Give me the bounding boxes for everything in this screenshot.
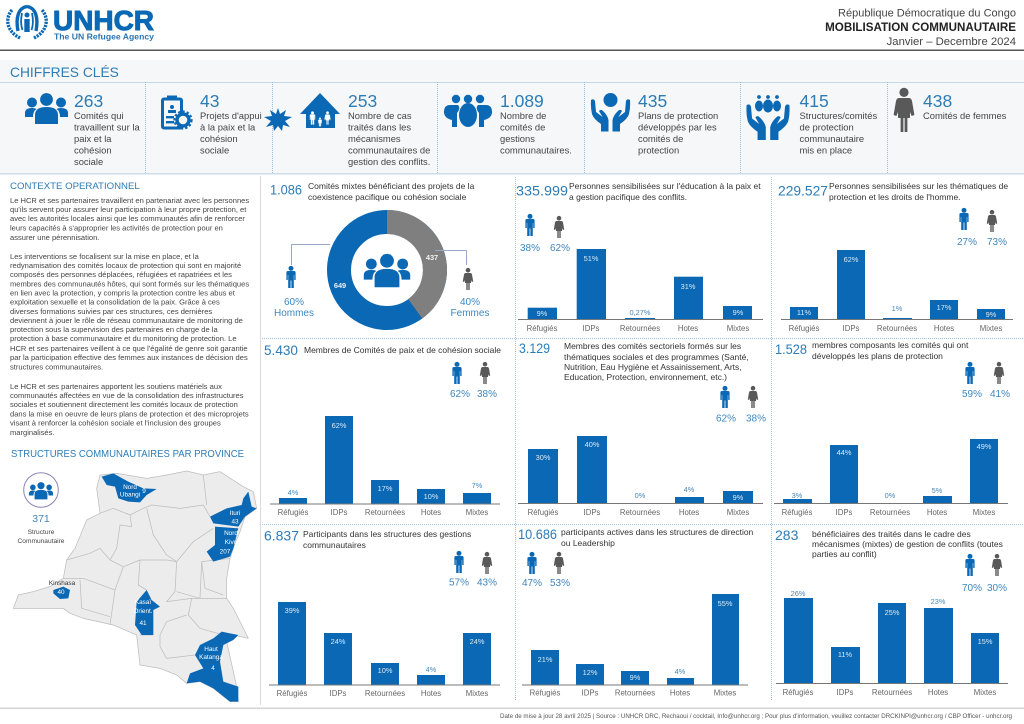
- bar chart: 7%: [472, 481, 483, 490]
- bar chart: Retournées: [872, 688, 912, 697]
- bar chart: IDPs: [583, 324, 600, 333]
- text block: contexte opérationnel: assurer une pérennisation.: [10, 233, 99, 242]
- panel: personnes sensibilisées paix: [516, 181, 763, 333]
- gender split: [962, 362, 1010, 400]
- gender split: 41%: [990, 389, 1010, 400]
- panel: bénéficiaires conflits: parties au conflit): [812, 549, 877, 559]
- kpi: 435 plans de protection: Plans de protection: [638, 110, 718, 121]
- gender split: 30%: [987, 583, 1007, 594]
- gender split: 62%: [450, 389, 470, 400]
- donut chart: 437: [426, 253, 438, 262]
- text block: contexte opérationnel: leurs capacités à s'approprier les activités de protection pour en: [10, 224, 223, 232]
- bar chart: IDPs: [584, 508, 601, 517]
- text block: contexte opérationnel: marginalisés.: [10, 428, 54, 437]
- map label: Nord Ubangi: Nord: [123, 484, 137, 491]
- bar chart: Retournées: [877, 324, 917, 333]
- bar chart: Mixtes: [466, 689, 488, 698]
- panel: participants structures de gestion: communautaires: [303, 540, 366, 550]
- text block: contexte opérationnel: visant à renforcer la cohésion sociale et l'inclusion des groupes: [10, 418, 221, 428]
- bar chart: 31%: [681, 282, 696, 291]
- bar chart: 62%: [844, 255, 859, 264]
- report title block: [825, 8, 1016, 48]
- bar chart: 23%: [931, 597, 946, 606]
- bar chart: Mixtes: [466, 508, 488, 517]
- bar chart: [776, 589, 1008, 697]
- bar chart: 24%: [470, 637, 485, 646]
- gender split: 73%: [987, 237, 1007, 248]
- bar chart: [269, 602, 500, 698]
- panel: comités sectoriels: thématiques sociales et des programmes (Santé,: [564, 352, 749, 362]
- kpi: 43 projets: Projets d'appui: [200, 110, 262, 121]
- panel: membres plans de protection: développés les plans de protection: [812, 351, 943, 361]
- kpi: 435 plans de protection: comités de: [638, 133, 683, 144]
- kpi: 43 projets: sociale: [200, 144, 229, 156]
- gender split: 70%: [962, 583, 982, 594]
- map: provinces RDC: [13, 471, 257, 702]
- gender split: 53%: [550, 578, 570, 589]
- kpi: 1.089 comités de gestion: Nombre de: [500, 110, 546, 121]
- bar chart: Mixtes: [727, 508, 749, 517]
- kpi: 415 structures: mis en place: [800, 144, 852, 156]
- text block: contexte opérationnel: exploitation sexuelle et la consolidation de la paix. Grâce à ces: [10, 298, 220, 306]
- bar chart: 0%: [635, 491, 646, 500]
- bar chart: 0%: [885, 491, 896, 500]
- panel: chiffres clés: [0, 60, 1024, 175]
- panel: participantes direction: ou Leadership: [561, 538, 615, 548]
- bar chart: [518, 436, 763, 517]
- panel: bénéficiaires conflits: 283: [775, 527, 799, 543]
- text block: contexte opérationnel: dans la mise en oeuvre de leurs plans de protection et des microprojets: [10, 410, 249, 418]
- bar chart: 51%: [584, 254, 599, 263]
- kpi: 1.089 comités de gestion: 1.089: [500, 91, 544, 111]
- bar chart: Mixtes: [980, 324, 1002, 333]
- kpi: 43 projets: 43: [200, 91, 219, 111]
- panel: participants structures de gestion: 6.837: [264, 528, 299, 544]
- footer source note: Date de mise à jour 28 avril 2025 | Source : UNHCR DRC, Rechaoui / cocktail, Info@unhcr.org ; Pour plus d'information, veuillez contacter DRCKINPI@unhcr.org / CBP Officer - unhcr.org: [500, 714, 1012, 720]
- gender split: 38%: [746, 414, 766, 424]
- bar chart: 4%: [684, 485, 695, 494]
- kpi: 415 structures: 415: [800, 91, 829, 111]
- bar chart: Hotes: [934, 324, 954, 333]
- gender split: 62%: [550, 243, 570, 254]
- bar chart: 21%: [538, 655, 553, 664]
- map label: Nord Kivu: Nord: [224, 530, 238, 537]
- panel: membres comités de paix: 5.430: [264, 342, 298, 358]
- kpi: 253 cas traités: communautaires de: [348, 144, 430, 156]
- panel: personnes sensibilisées droits: Personnes sensibilisées sur les thématiques de: [829, 181, 1008, 191]
- kpi: 415 structures: de protection: [800, 122, 854, 132]
- share: hommes: [274, 266, 314, 319]
- bar chart: IDPs: [843, 324, 860, 333]
- text block: contexte opérationnel: diverses formations suivies par ces structures, ces dernières: [10, 307, 212, 316]
- kpi: 43 projets: à la paix et la: [200, 122, 256, 132]
- kpi: 253 cas traités: traités dans les: [348, 122, 411, 132]
- text block: contexte opérationnel: deviennent à jouer le rôle de réseau communautaire de monitoring de: [10, 316, 243, 325]
- bar chart: 10%: [378, 666, 393, 675]
- callout: 371 structures communautaires: 371: [32, 513, 50, 525]
- bar chart: [522, 594, 748, 698]
- panel: personnes sensibilisées droits: [778, 181, 1013, 333]
- bar chart: Réfugiés: [782, 508, 812, 517]
- kpi: 415 structures: communautaire: [800, 133, 864, 144]
- icon: laurel wreath and sheltering hands: [8, 6, 46, 38]
- bar chart: 3%: [792, 491, 803, 500]
- bar chart: Hotes: [421, 508, 441, 517]
- bar chart: 24%: [331, 637, 346, 646]
- map label: Kasaï Oriental: 41: [139, 620, 147, 627]
- kpi: 435 plans de protection: [591, 91, 718, 156]
- kpi: 1.089 comités de gestion: communautaires.: [500, 144, 572, 156]
- bar chart: 4%: [288, 488, 299, 497]
- kpi: 415 structures: Structures/comités: [800, 110, 877, 121]
- text block: contexte opérationnel: avec les autorités locales ainsi que les communautés afin de renforcer: [10, 214, 245, 223]
- share: femmes: Femmes: [451, 308, 489, 319]
- report title block: République Démocratique du Congo: [838, 8, 1016, 20]
- bar chart: 17%: [378, 484, 393, 493]
- kpi: 438 comités de femmes: Comités de femmes: [923, 110, 1007, 121]
- bar chart: Retournées: [620, 324, 660, 333]
- bar chart: 26%: [791, 589, 806, 598]
- bar chart: 9%: [630, 673, 641, 682]
- bar chart: 4%: [426, 665, 437, 674]
- callout: 371 structures communautaires: Communautaire: [18, 538, 65, 545]
- bar chart: [270, 416, 500, 517]
- map label: Kinshasa: 40: [57, 589, 65, 596]
- kpi: 253 cas traités: Nombre de cas: [348, 110, 412, 121]
- logo tagline: The UN Refugee Agency: [54, 32, 154, 42]
- kpi: 435 plans de protection: développés par les: [638, 122, 717, 132]
- gender split: [520, 214, 570, 254]
- gender split: 43%: [477, 578, 497, 588]
- text block: contexte opérationnel: Le HCR et ses partenaires apportent les soutiens matériels aux: [10, 382, 222, 391]
- bar chart: Réfugiés: [783, 688, 813, 697]
- bar chart: 40%: [585, 440, 600, 449]
- map label: Ituri: 43: [231, 518, 239, 526]
- bar chart: [518, 249, 763, 333]
- text block: contexte opérationnel: en lien avec la protection, y compris la protection contre les abus et: [10, 288, 236, 298]
- bar chart: Hotes: [421, 689, 441, 698]
- text block: contexte opérationnel: communautés affectées en vue de la consolidation des infrastructures: [10, 391, 244, 400]
- map label: Nord Ubangi: 9: [142, 488, 146, 495]
- panel title: Comités mixtes bénéficiant des projets de la: [308, 181, 475, 191]
- bar chart: 5%: [932, 486, 943, 495]
- heading: contexte opérationnel: CONTEXTE OPERATIONNEL: [10, 181, 140, 192]
- bar chart: Hotes: [928, 688, 948, 697]
- bar chart: IDPs: [331, 508, 348, 517]
- map label: Nord Kivu: Kivu: [225, 539, 238, 546]
- callout: 371 structures communautaires: Structure: [28, 529, 55, 536]
- report title block: MOBILISATION COMMUNAUTAIRE: [825, 21, 1016, 34]
- panel: bénéficiaires conflits: mécanismes (mixtes) de gestion de conflits (toutes: [812, 539, 1003, 549]
- kpi: 1.089 comités de gestion: gestions: [500, 133, 535, 144]
- bar chart: 9%: [986, 310, 997, 319]
- kpi: 253 cas traités: 253: [348, 91, 377, 111]
- kpi: 253 cas traités: [264, 91, 430, 167]
- kpi: 435 plans de protection: protection: [638, 144, 679, 156]
- bar chart: [781, 250, 1013, 333]
- panel: participantes direction: participants actives dans les structures de direction: [561, 527, 754, 537]
- text block: contexte opérationnel: Le HCR et ses partenaires travaillent en partenariat avec les personnes: [10, 196, 249, 205]
- map label: Kasaï Oriental: Orient.: [133, 608, 153, 615]
- bar chart: Mixtes: [727, 324, 749, 333]
- bar chart: 62%: [332, 421, 347, 430]
- bar chart: 17%: [937, 303, 952, 312]
- kpi: 1.089 comités de gestion: [444, 91, 572, 156]
- text block: contexte opérationnel: membres des communautés hôtes, qui sont formés sur les thématiques: [10, 280, 249, 288]
- panel: membres comités de paix: [264, 342, 501, 517]
- panel: comités sectoriels: 3.129: [519, 340, 550, 356]
- bar chart: 49%: [977, 442, 992, 451]
- text block: contexte opérationnel: structures communautaires.: [10, 362, 103, 372]
- kpi: 1.089 comités de gestion: comités de: [500, 122, 545, 132]
- kpi: 438 comités de femmes: 438: [923, 91, 952, 111]
- UNHCR logo: [8, 5, 154, 42]
- bar chart: 10%: [424, 492, 439, 501]
- panel: bénéficiaires conflits: [775, 527, 1008, 697]
- bar chart: Réfugiés: [528, 508, 558, 517]
- bar chart: IDPs: [582, 688, 599, 698]
- gender split: [957, 208, 1007, 248]
- bar chart: 25%: [885, 608, 900, 617]
- bar chart: 30%: [536, 453, 551, 462]
- panel: membres plans de protection: [774, 340, 1010, 517]
- text block: contexte opérationnel: composés des personnes déplacées, réfugiées et rapatriées et les: [10, 270, 232, 279]
- panel: comités sectoriels: [518, 340, 766, 517]
- panel: comités sectoriels: Education, Protection, environnement, etc.): [564, 372, 727, 382]
- bar chart: 39%: [285, 606, 300, 615]
- bar chart: 9%: [733, 308, 744, 317]
- text block: contexte opérationnel: qu'ils servent pour assurer leur participation à leur propre protection, et: [10, 205, 247, 214]
- text block: contexte opérationnel: protection sous la supervision des partenaires en charge de la: [10, 325, 218, 334]
- bar chart: Retournées: [870, 508, 910, 517]
- bar chart: 9%: [733, 493, 744, 502]
- bar chart: Hotes: [679, 508, 699, 517]
- map label: Kinshasa: Kinshasa: [49, 580, 76, 587]
- bar chart: 9%: [537, 309, 548, 318]
- bar chart: 44%: [837, 448, 852, 457]
- panel: personnes sensibilisées paix: a gestion pacifique des conflits.: [569, 192, 687, 202]
- gender split: [716, 386, 766, 424]
- bar chart: Réfugiés: [278, 508, 308, 517]
- bar chart: Hotes: [670, 688, 690, 698]
- bar chart: 11%: [797, 308, 812, 317]
- gender split: 57%: [449, 578, 469, 588]
- donut chart: 649: [334, 281, 346, 290]
- map label: Ituri: Ituri: [230, 510, 240, 517]
- panel: personnes sensibilisées droits: 229.527: [778, 182, 828, 198]
- map label: Haut Katanga: 4: [211, 665, 215, 672]
- bar chart: Mixtes: [714, 688, 736, 698]
- kpi: 438 comités de femmes: [894, 88, 1007, 132]
- gender split: [449, 551, 497, 588]
- panel: membres plans de protection: membres composants les comités qui ont: [812, 340, 969, 350]
- panel: participantes direction: 10.686: [518, 526, 557, 542]
- panel: participantes direction: [518, 526, 754, 698]
- bar chart: Hotes: [927, 508, 947, 517]
- bar chart: 1%: [892, 304, 903, 313]
- bar chart: Mixtes: [974, 688, 996, 697]
- text block: contexte opérationnel: HCR et ses partenaires veillent à ce que l'égalité de genre soit garantie: [10, 344, 248, 353]
- bar chart: IDPs: [837, 688, 854, 697]
- bar chart: Réfugiés: [277, 689, 307, 698]
- kpi: 263 comités: sociale: [74, 156, 103, 167]
- kpi: 415 structures: [746, 91, 877, 156]
- report title block: Janvier – Decembre 2024: [887, 36, 1016, 48]
- bar chart: Retournées: [620, 508, 660, 517]
- kpi: 253 cas traités: gestion des conflits.: [348, 156, 430, 167]
- panel: comités sectoriels: Nutrition, Eau Hygiène et Assainissement, Arts,: [564, 362, 742, 372]
- kpi: 253 cas traités: mécanismes: [348, 133, 401, 144]
- bar chart: [774, 439, 1008, 517]
- bar chart: 55%: [718, 599, 733, 608]
- leader lines: [292, 244, 466, 265]
- panel: participants structures de gestion: [264, 528, 500, 698]
- bar chart: Hotes: [678, 324, 698, 333]
- kpi: 263 comités: cohésion: [74, 144, 112, 156]
- panel: comités sectoriels: Membres des comités sectoriels formés sur les: [564, 341, 741, 351]
- share: femmes: [451, 268, 489, 319]
- panel: comités mixtes donut: [270, 181, 489, 319]
- bar chart: Mixtes: [973, 508, 995, 517]
- map label: Haut Katanga: Haut: [204, 646, 218, 653]
- gender split: [450, 362, 497, 400]
- text block: contexte opérationnel: protection à base communautaire et du monitoring de protection. Le: [10, 334, 237, 343]
- gender split: 62%: [716, 414, 736, 424]
- kpi: 263 comités: travaillent sur la: [74, 122, 140, 132]
- bar chart: 4%: [675, 667, 686, 676]
- bar chart: Retournées: [365, 508, 405, 517]
- callout: 371 structures communautaires: [18, 473, 65, 545]
- bar chart: Retournées: [615, 688, 655, 698]
- map label: Kasaï Oriental: Kasaï: [135, 599, 151, 606]
- text block: contexte opérationnel: Les interventions se focalisent sur la mise en place, et la: [10, 252, 200, 261]
- panel: participants structures de gestion: Participants dans les structures des gestions: [303, 529, 471, 539]
- gender split: 59%: [962, 389, 982, 400]
- gender split: 47%: [522, 578, 542, 589]
- kpi: 263 comités: Comités qui: [74, 110, 124, 121]
- kpi: 435 plans de protection: 435: [638, 91, 667, 111]
- bar chart: 15%: [978, 637, 993, 646]
- kpi: 43 projets: [162, 91, 262, 156]
- panel title: coexistence pacifique ou cohésion sociale: [308, 192, 467, 202]
- bar chart: IDPs: [836, 508, 853, 517]
- heading: chiffres clés: CHIFFRES CLÉS: [10, 64, 119, 80]
- gender split: [522, 552, 570, 589]
- map label: Haut Katanga: Katanga: [199, 654, 223, 661]
- kpi: 43 projets: cohésion: [200, 133, 238, 144]
- panel: membres plans de protection: 1.528: [775, 341, 807, 357]
- kpi: 263 comités: [25, 91, 140, 167]
- map label: Nord Ubangi: Ubangi: [120, 492, 140, 498]
- kpi: 263 comités: 263: [74, 91, 103, 111]
- panel: personnes sensibilisées paix: 335.999: [516, 182, 568, 198]
- gender split: 38%: [520, 243, 540, 254]
- bar chart: Réfugiés: [789, 324, 819, 333]
- bar chart: Réfugiés: [527, 324, 557, 333]
- map label: Nord Kivu: 207: [220, 548, 231, 556]
- text block: contexte opérationnel: par la participation effective des femmes aux instances de décision des: [10, 353, 248, 362]
- panel: bénéficiaires conflits: bénéficiaires des traités dans le cadre des: [812, 529, 971, 539]
- logo wordmark: UNHCR: [53, 5, 154, 36]
- bar chart: Réfugiés: [530, 688, 560, 698]
- bar chart: 11%: [838, 650, 853, 659]
- text block: contexte opérationnel: sociales et soutiennent directement les comités locaux de protection: [10, 400, 238, 409]
- panel: personnes sensibilisées droits: protection et les droits de l'homme.: [829, 192, 961, 202]
- heading figure: 1.086: [270, 182, 302, 198]
- share: hommes: 60%: [284, 297, 304, 308]
- gender split: 27%: [957, 237, 977, 248]
- text block: contexte opérationnel: redynamisation des comités locaux de protection qui sont en majorité: [10, 261, 241, 270]
- panel: membres comités de paix: Membres de Comités de paix et de cohésion sociale: [304, 345, 501, 355]
- donut chart: [334, 222, 438, 318]
- gender split: [962, 554, 1007, 594]
- heading: structures par province: STRUCTURES COMMUNAUTAIRES PAR PROVINCE: [11, 449, 244, 460]
- kpi: 263 comités: paix et la: [74, 133, 112, 144]
- share: hommes: Hommes: [274, 308, 314, 319]
- gender split: 38%: [477, 389, 497, 400]
- bar chart: Retournées: [365, 689, 405, 698]
- panel: personnes sensibilisées paix: Personnes sensibilisées sur l'éducation à la paix et: [569, 181, 761, 191]
- bar chart: 12%: [583, 668, 598, 677]
- bar chart: 0,27%: [630, 308, 651, 317]
- bar chart: IDPs: [330, 689, 347, 698]
- share: femmes: 40%: [460, 297, 480, 308]
